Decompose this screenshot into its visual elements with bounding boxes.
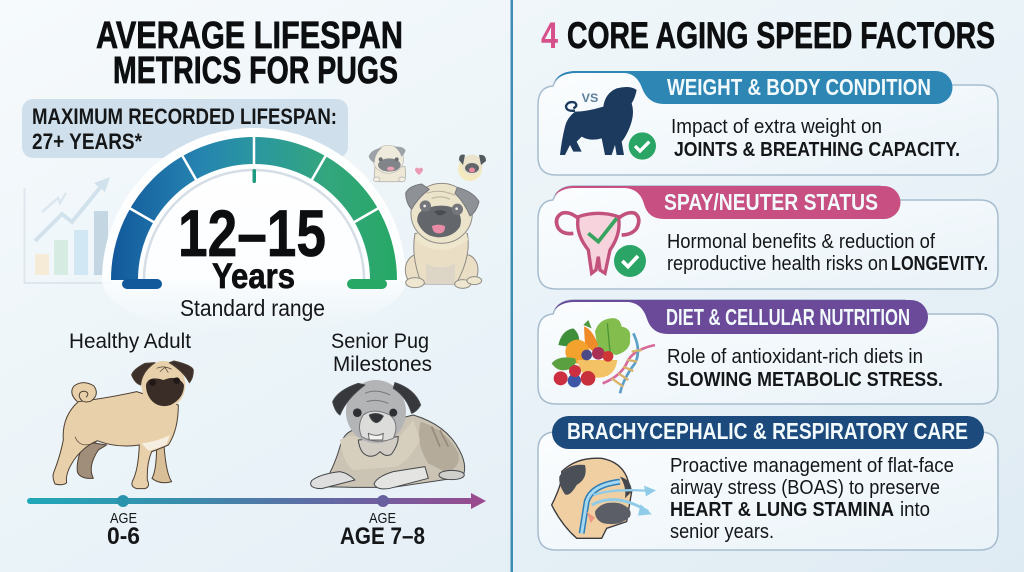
icon: vegetables, berries and DNA: [552, 318, 655, 393]
body text: weight: JOINTS & BREATHING CAPACITY.: [674, 139, 960, 161]
body text: spay and neuter: Hormonal benefits & reduction of: [667, 231, 935, 253]
body text: spay and neuter: LONGEVITY.: [891, 253, 988, 275]
body text: respiratory care: senior years.: [670, 521, 774, 543]
small pug right: [458, 154, 486, 181]
milestone label: senior pug: Senior Pug: [331, 330, 429, 353]
header: diet and cellular nutrition: [554, 300, 928, 334]
timeline label: age 7-8: AGE: [369, 510, 396, 527]
large sitting pug: [405, 183, 482, 288]
header: spay and neuter status: [554, 186, 901, 219]
body text: weight: [671, 116, 960, 161]
body text: respiratory care: into: [900, 499, 930, 521]
timeline label: age 7-8: [340, 510, 425, 550]
timeline label: age 0-6: [107, 510, 140, 550]
gauge: standard lifespan: [102, 128, 406, 335]
timeline label: age 7-8: AGE 7–8: [340, 523, 425, 550]
body text: spay and neuter: [667, 231, 988, 275]
icon: airway cross-section: [552, 458, 656, 538]
body text: respiratory care: [670, 455, 954, 543]
illustration: healthy adult pug: [53, 361, 193, 489]
callout: maximum recorded lifespan: [22, 99, 348, 158]
body text: weight: Impact of extra weight on: [671, 116, 882, 138]
header: weight and body condition: [554, 71, 953, 104]
header: weight and body condition: WEIGHT & BODY CONDITION: [667, 74, 931, 100]
body text: respiratory care: HEART & LUNG STAMINA: [670, 499, 894, 521]
title: lifespan metrics: AVERAGE LIFESPAN: [96, 15, 403, 57]
title: lifespan metrics: [96, 15, 403, 92]
timeline label: age 0-6: AGE: [110, 510, 137, 527]
milestone label: senior pug: [331, 330, 432, 376]
panel: spay and neuter status: [538, 186, 998, 289]
header: spay and neuter status: SPAY/NEUTER STATUS: [664, 189, 878, 215]
body text: diet: [667, 346, 943, 391]
callout: maximum recorded lifespan: 27+ YEARS*: [32, 129, 142, 154]
header: diet and cellular nutrition: DIET & CELLULAR NUTRITION: [666, 304, 910, 330]
panel: diet and cellular nutrition: [538, 300, 998, 404]
milestone label: healthy adult: Healthy Adult: [69, 330, 191, 353]
body text: diet: SLOWING METABOLIC STRESS.: [667, 369, 943, 391]
callout: maximum recorded lifespan: MAXIMUM RECORDED LIFESPAN:: [32, 104, 337, 129]
body text: diet: Role of antioxidant-rich diets in: [667, 346, 923, 368]
body text: respiratory care: airway stress (BOAS) to preserve: [670, 477, 940, 499]
gauge caption: Standard range: [180, 295, 325, 321]
faded growth chart: [24, 177, 112, 283]
icon: pug silhouette with check: VS: [582, 91, 598, 105]
center divider: [510, 0, 513, 572]
gauge unit: Years: [212, 257, 295, 296]
body text: respiratory care: Proactive management of flat-face: [670, 455, 954, 477]
title: lifespan metrics: METRICS FOR PUGS: [113, 50, 398, 92]
timeline label: age 0-6: 0-6: [107, 523, 140, 550]
milestone label: senior pug: Milestones: [333, 353, 432, 376]
illustration: cute pugs and heart: [369, 145, 486, 288]
icon: reproductive system with check: [556, 213, 646, 277]
panel: weight and body condition: [538, 71, 998, 175]
small heart: [415, 168, 423, 175]
gauge value: 12–15: [178, 196, 326, 270]
icon: pug silhouette with check: [560, 87, 656, 160]
illustration: senior pug lying down: [311, 380, 465, 489]
timeline arrow: [27, 493, 486, 509]
small pug left: [369, 145, 406, 182]
body text: spay and neuter: reproductive health risks on: [667, 253, 888, 275]
title: aging speed factors: 4: [541, 15, 558, 56]
panel: brachycephalic and respiratory care: [538, 416, 998, 550]
